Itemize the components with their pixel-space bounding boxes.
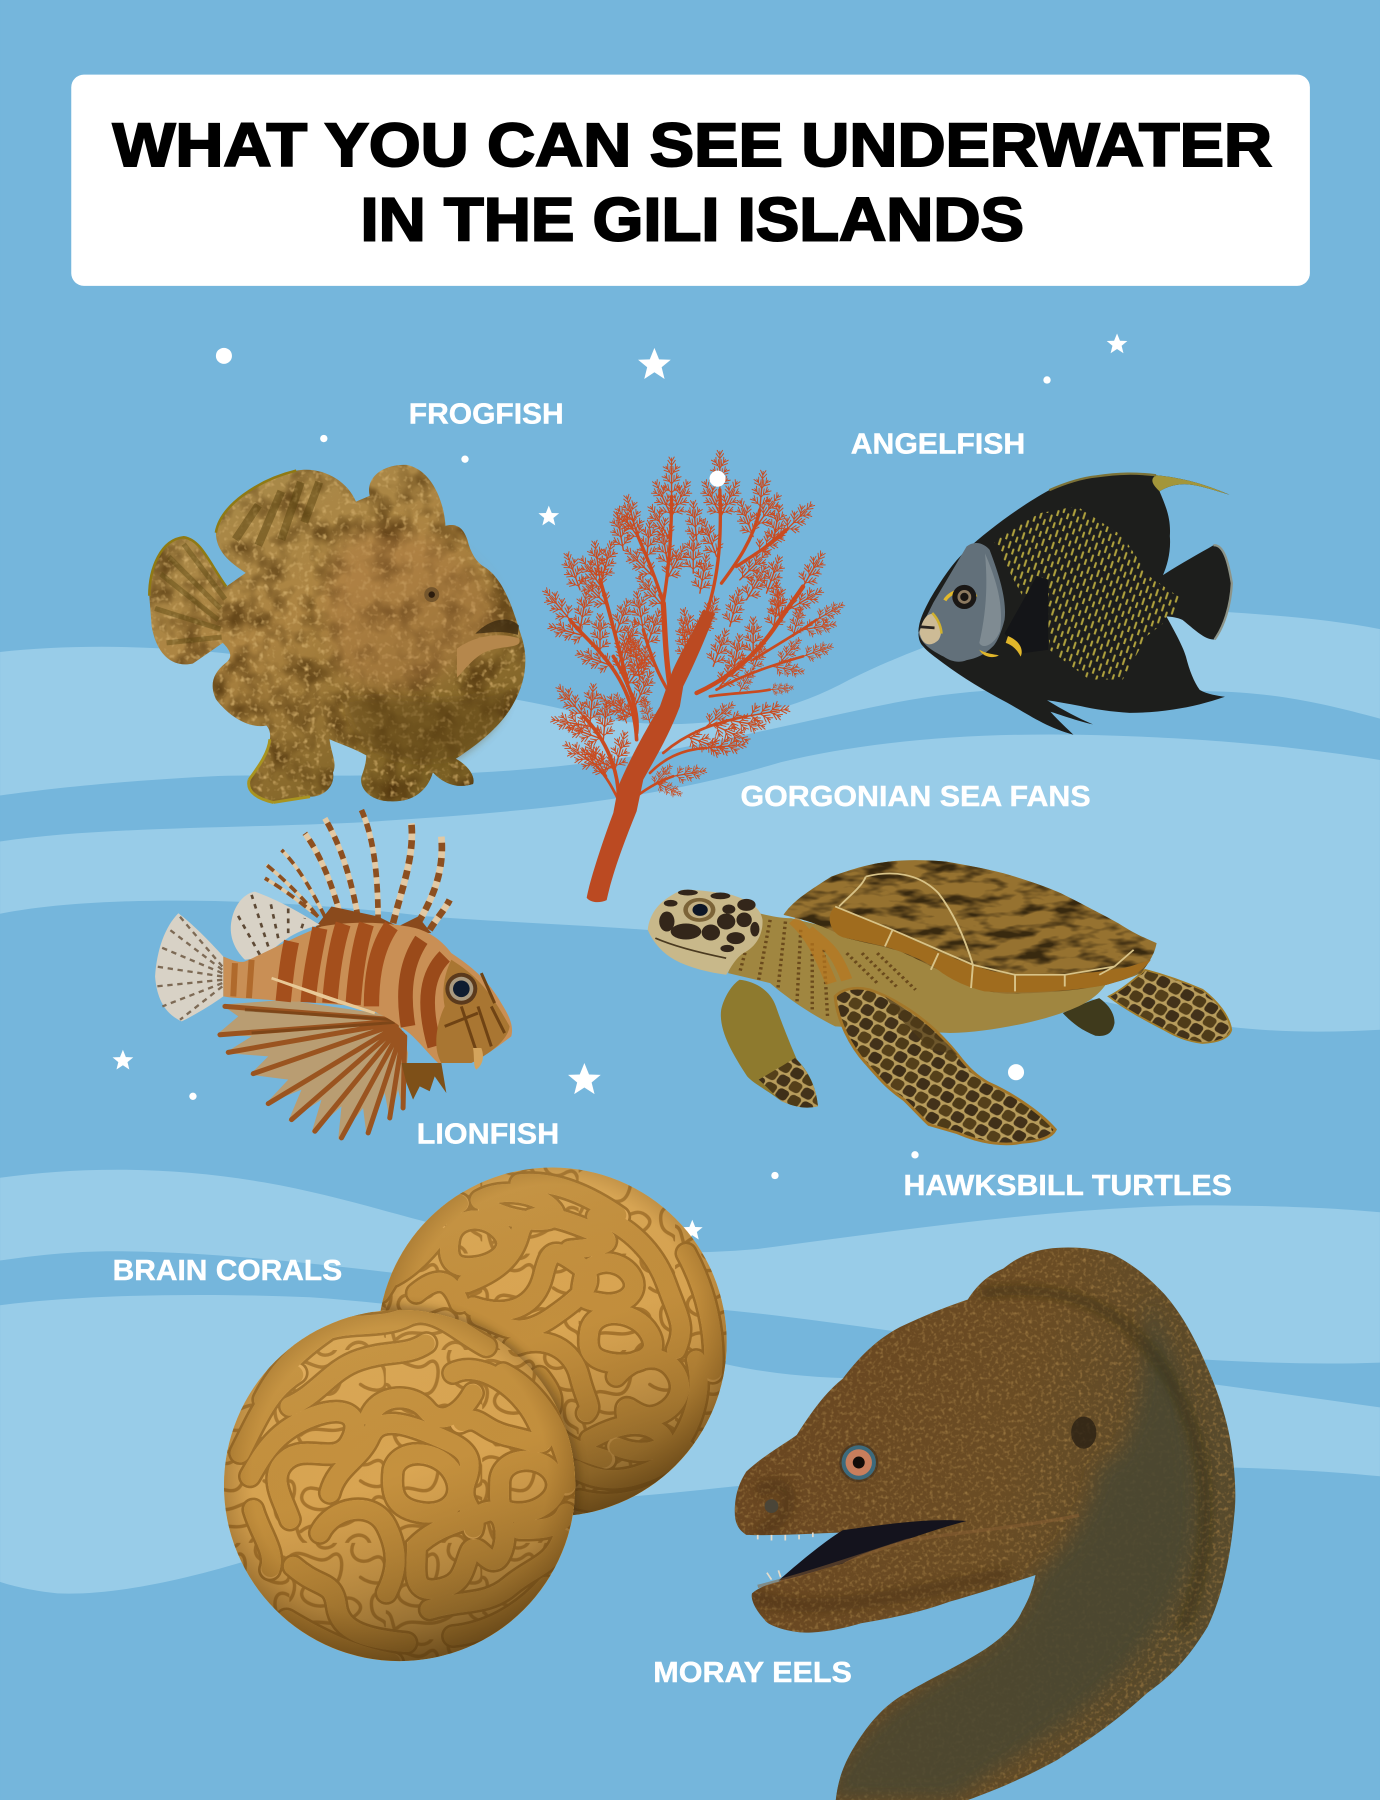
second dorsal fin [231, 892, 320, 960]
illustration: lionfish [155, 810, 512, 1140]
left flipper [721, 980, 818, 1108]
carapace [784, 860, 1157, 994]
label: frogfish: FROGFISH [409, 399, 564, 431]
front coral [224, 1310, 575, 1663]
lower head fin [401, 1063, 446, 1100]
title banner: WHAT YOU CAN SEE UNDERWATER [113, 111, 1272, 179]
label: moray eels: MORAY EELS [653, 1657, 852, 1689]
illustration: frogfish [149, 465, 525, 802]
decorative bubbles and stars [113, 333, 1127, 1239]
background waves [0, 607, 1380, 1594]
illustration: brain corals [219, 1167, 727, 1666]
title banner [71, 75, 1310, 286]
pectoral fan [217, 1000, 408, 1140]
head [648, 890, 763, 975]
illustration: gorgonian sea fan [536, 450, 848, 902]
label: lionfish: LIONFISH [417, 1118, 559, 1150]
tail fan [155, 913, 223, 1021]
front flipper [835, 988, 1055, 1144]
label: angelfish: ANGELFISH [851, 428, 1025, 460]
illustration: french angelfish [918, 474, 1232, 735]
label: hawksbill turtles: HAWKSBILL TURTLES [904, 1170, 1232, 1202]
neck and body [728, 912, 1107, 1033]
illustration: hawksbill turtle [648, 860, 1231, 1144]
dorsal spines [265, 810, 450, 930]
illustration: moray eel [735, 1248, 1235, 1800]
rear coral [380, 1168, 727, 1516]
title banner: IN THE GILI ISLANDS [361, 186, 1024, 254]
sea fan trunk [587, 610, 715, 902]
label: gorgonian sea fans: GORGONIAN SEA FANS [741, 781, 1091, 813]
rear flipper [1109, 970, 1231, 1043]
label: brain corals: BRAIN CORALS [113, 1255, 342, 1287]
body [223, 923, 512, 1063]
small hind flipper [1063, 998, 1115, 1036]
